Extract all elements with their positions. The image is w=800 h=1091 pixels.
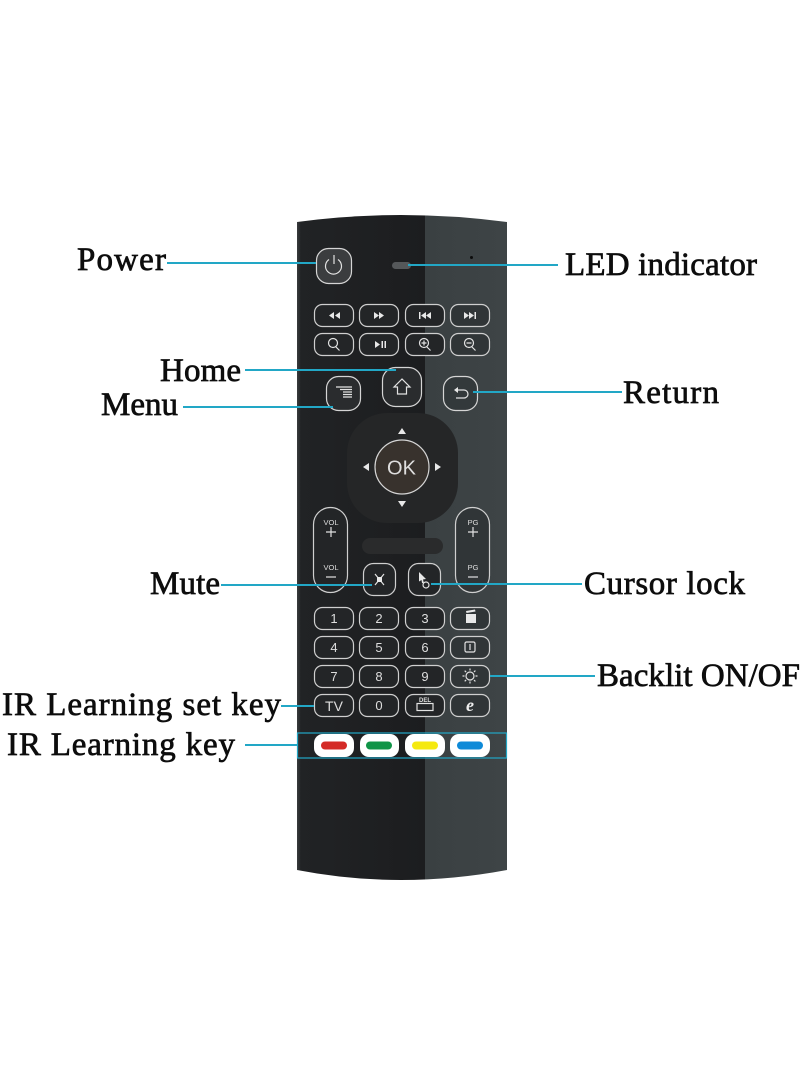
sensor dot (470, 256, 473, 259)
LED indicator (392, 262, 411, 269)
callout: Return: Return (623, 375, 719, 411)
number keys: 8 (375, 669, 383, 684)
color keys (314, 734, 490, 757)
callout: Power: Power (77, 242, 166, 278)
volume rocker: VOL (323, 518, 339, 527)
callout: IR Learning key: IR Learning key (7, 727, 236, 763)
number keys (314, 608, 490, 716)
number keys: DEL (419, 698, 431, 704)
number keys: TV (325, 698, 344, 714)
remote control body (297, 210, 507, 890)
directional pad (347, 413, 458, 523)
number keys: 7 (330, 669, 338, 684)
page rocker (456, 508, 490, 592)
callout: Home: Home (160, 353, 241, 389)
number keys: 0 (375, 698, 383, 713)
media buttons (314, 304, 490, 356)
number keys: 1 (330, 611, 338, 626)
number keys: 9 (421, 669, 429, 684)
number keys: 4 (330, 640, 338, 655)
callout: LED indicator: LED indicator (565, 247, 757, 283)
callout: Backlit ON/OF: Backlit ON/OF (597, 658, 800, 694)
number keys: 5 (375, 640, 383, 655)
number keys: 6 (421, 640, 429, 655)
callout: Mute: Mute (150, 566, 220, 602)
number keys: e (466, 695, 474, 715)
IR learning key highlight box (298, 733, 506, 758)
home button (382, 368, 422, 406)
power button (316, 248, 352, 284)
return button (444, 376, 478, 410)
page rocker: PG (468, 518, 479, 527)
number keys: 3 (421, 611, 429, 626)
mute button (364, 564, 396, 596)
microphone slot (362, 538, 443, 554)
menu button (326, 376, 360, 410)
volume rocker (314, 508, 348, 592)
page rocker: PG (468, 563, 479, 572)
callout: Menu: Menu (101, 387, 178, 423)
callout: Cursor lock: Cursor lock (584, 566, 746, 602)
callout: IR Learning set key: IR Learning set key (2, 687, 282, 723)
directional pad: OK (387, 458, 417, 480)
volume rocker: VOL (323, 563, 339, 572)
number keys: 2 (375, 611, 383, 626)
cursor lock button (408, 564, 440, 596)
